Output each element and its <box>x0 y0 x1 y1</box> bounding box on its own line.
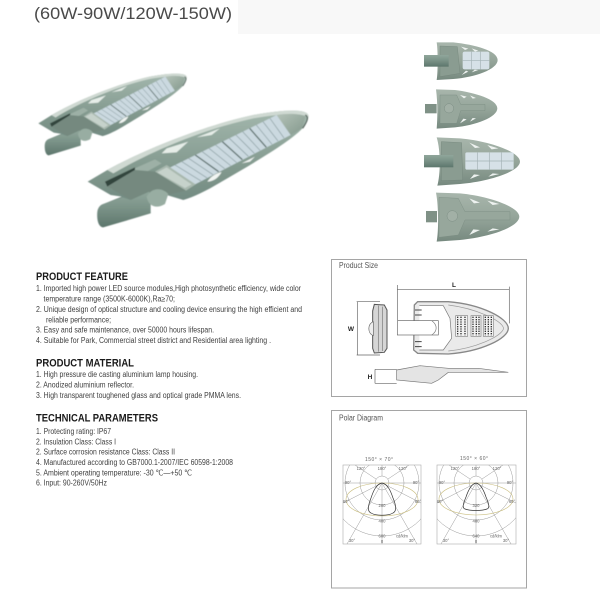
chart: polar 150×70: 0 <box>381 539 384 544</box>
text block: product feature list: temperature range (3500K-6000K),Ra≥70; <box>44 294 175 304</box>
text block: product feature list: 2. Unique design of optical structure and cooling device ensuring the high efficient and <box>36 305 302 314</box>
chart: polar 150×70: 200 <box>378 503 386 508</box>
chart: polar 150×60: 180° <box>472 466 481 471</box>
chart: polar 150×70: 90° <box>413 480 419 485</box>
text block: technical parameters list: 6. Input: 90-260V/50Hz <box>36 478 107 488</box>
text block: technical parameters list <box>36 427 233 488</box>
chart: polar 150×70: 150° × 70° <box>365 457 393 463</box>
text block: product material list: 3. High transparent toughened glass and optical grade PMMA lens. <box>36 391 241 400</box>
panel: polar diagram <box>329 410 529 588</box>
dimension labels: H <box>368 374 373 381</box>
heading: technical parameters: TECHNICAL PARAMETERS <box>36 413 158 425</box>
title: (60W-90W/120W-150W) <box>34 4 232 23</box>
text block: technical parameters list: 2. Insulation Class: Class I <box>36 437 116 446</box>
chart: polar 150×60: 30° <box>503 538 509 543</box>
chart: polar 150×70: 120° <box>357 466 366 471</box>
panel label: Product Size <box>339 261 378 270</box>
icon: large lamp <box>88 111 309 227</box>
chart: polar 150×60: 60° <box>437 499 443 504</box>
chart: polar 150×60: 120° <box>451 466 460 471</box>
chart: polar 150×70: 90° <box>345 480 351 485</box>
text block: technical parameters list: 4. Manufactured according to GB7000.1-2007/IEC 60598-1:2008 <box>36 458 233 467</box>
heading: product material: PRODUCT MATERIAL <box>36 358 134 370</box>
chart: polar 150×60: 150° × 60° <box>460 456 488 462</box>
chart: polar 150×70 <box>342 457 422 544</box>
lamp D back view <box>426 193 519 242</box>
panel: product size <box>332 260 526 396</box>
icon: small lamp <box>38 74 187 155</box>
chart: polar 150×70: 600 <box>378 534 386 538</box>
chart: polar 150×60 <box>436 456 516 544</box>
chart: polar 150×70: 120° <box>399 466 408 471</box>
lamp A front view <box>424 42 498 80</box>
chart: polar 150×60: 120° <box>493 466 502 471</box>
chart: polar 150×60: 30° <box>443 538 449 543</box>
chart: polar 150×70: 180° <box>378 466 387 471</box>
text block: technical parameters list: 1. Protecting rating: IP67 <box>36 427 111 436</box>
product photos: top and bottom views <box>424 42 520 242</box>
heading: product feature: PRODUCT FEATURE <box>36 271 128 283</box>
chart: polar 150×70: cd/klm <box>396 534 409 538</box>
chart: polar 150×70: 400 <box>378 518 386 524</box>
dimension labels: L <box>452 282 456 289</box>
chart: polar 150×60: 640 <box>472 534 480 538</box>
text block: technical parameters list: 2. Surface corrosion resistance Class: Class II <box>36 448 175 457</box>
dimension labels <box>348 282 456 381</box>
chart: polar 150×70: 30° <box>349 538 355 543</box>
product photo: angled street lamps <box>38 74 309 227</box>
text block: product material list <box>36 370 241 400</box>
chart: polar 150×70: 60° <box>343 499 349 504</box>
decorative top band <box>238 0 600 34</box>
text block: product feature list: reliable performance; <box>46 315 111 324</box>
text block: product material list: 1. High pressure die casting aluminium lamp housing. <box>36 370 198 379</box>
panel label: Polar Diagram <box>339 414 383 423</box>
dimension drawing <box>357 285 509 383</box>
chart: polar 150×60: cd/klm <box>490 534 503 538</box>
chart: polar 150×70: 60° <box>415 499 421 504</box>
dimension labels: W <box>348 326 355 333</box>
text block: product material list: 2. Anodized aluminium reflector. <box>36 381 134 390</box>
text block: product feature list: 1. Imported high power LED source modules,High photosynthetic efficiency, wide color <box>36 284 301 293</box>
text block: product feature list: 3. Easy and safe maintenance, over 50000 hours lifespan. <box>36 326 214 335</box>
chart: polar 150×60: 0 <box>475 539 478 544</box>
chart: polar 150×70: 30° <box>409 538 415 543</box>
chart: polar 150×60: 90° <box>507 480 513 485</box>
chart: polar 150×60: 320 <box>472 503 480 508</box>
text block: technical parameters list: 5. Ambient operating temperature: -30 ℃—+50 ℃ <box>36 468 192 478</box>
text block: product feature list: 4. Suitable for Park, Commercial street district and Residential area lighting . <box>36 336 271 345</box>
lamp C front view <box>424 137 520 186</box>
chart: polar 150×60: 480 <box>472 518 480 524</box>
lamp B back view <box>425 89 497 129</box>
chart: polar 150×60: 90° <box>439 480 445 485</box>
chart: polar 150×60: 60° <box>509 499 515 504</box>
text block: product feature list <box>36 284 302 345</box>
